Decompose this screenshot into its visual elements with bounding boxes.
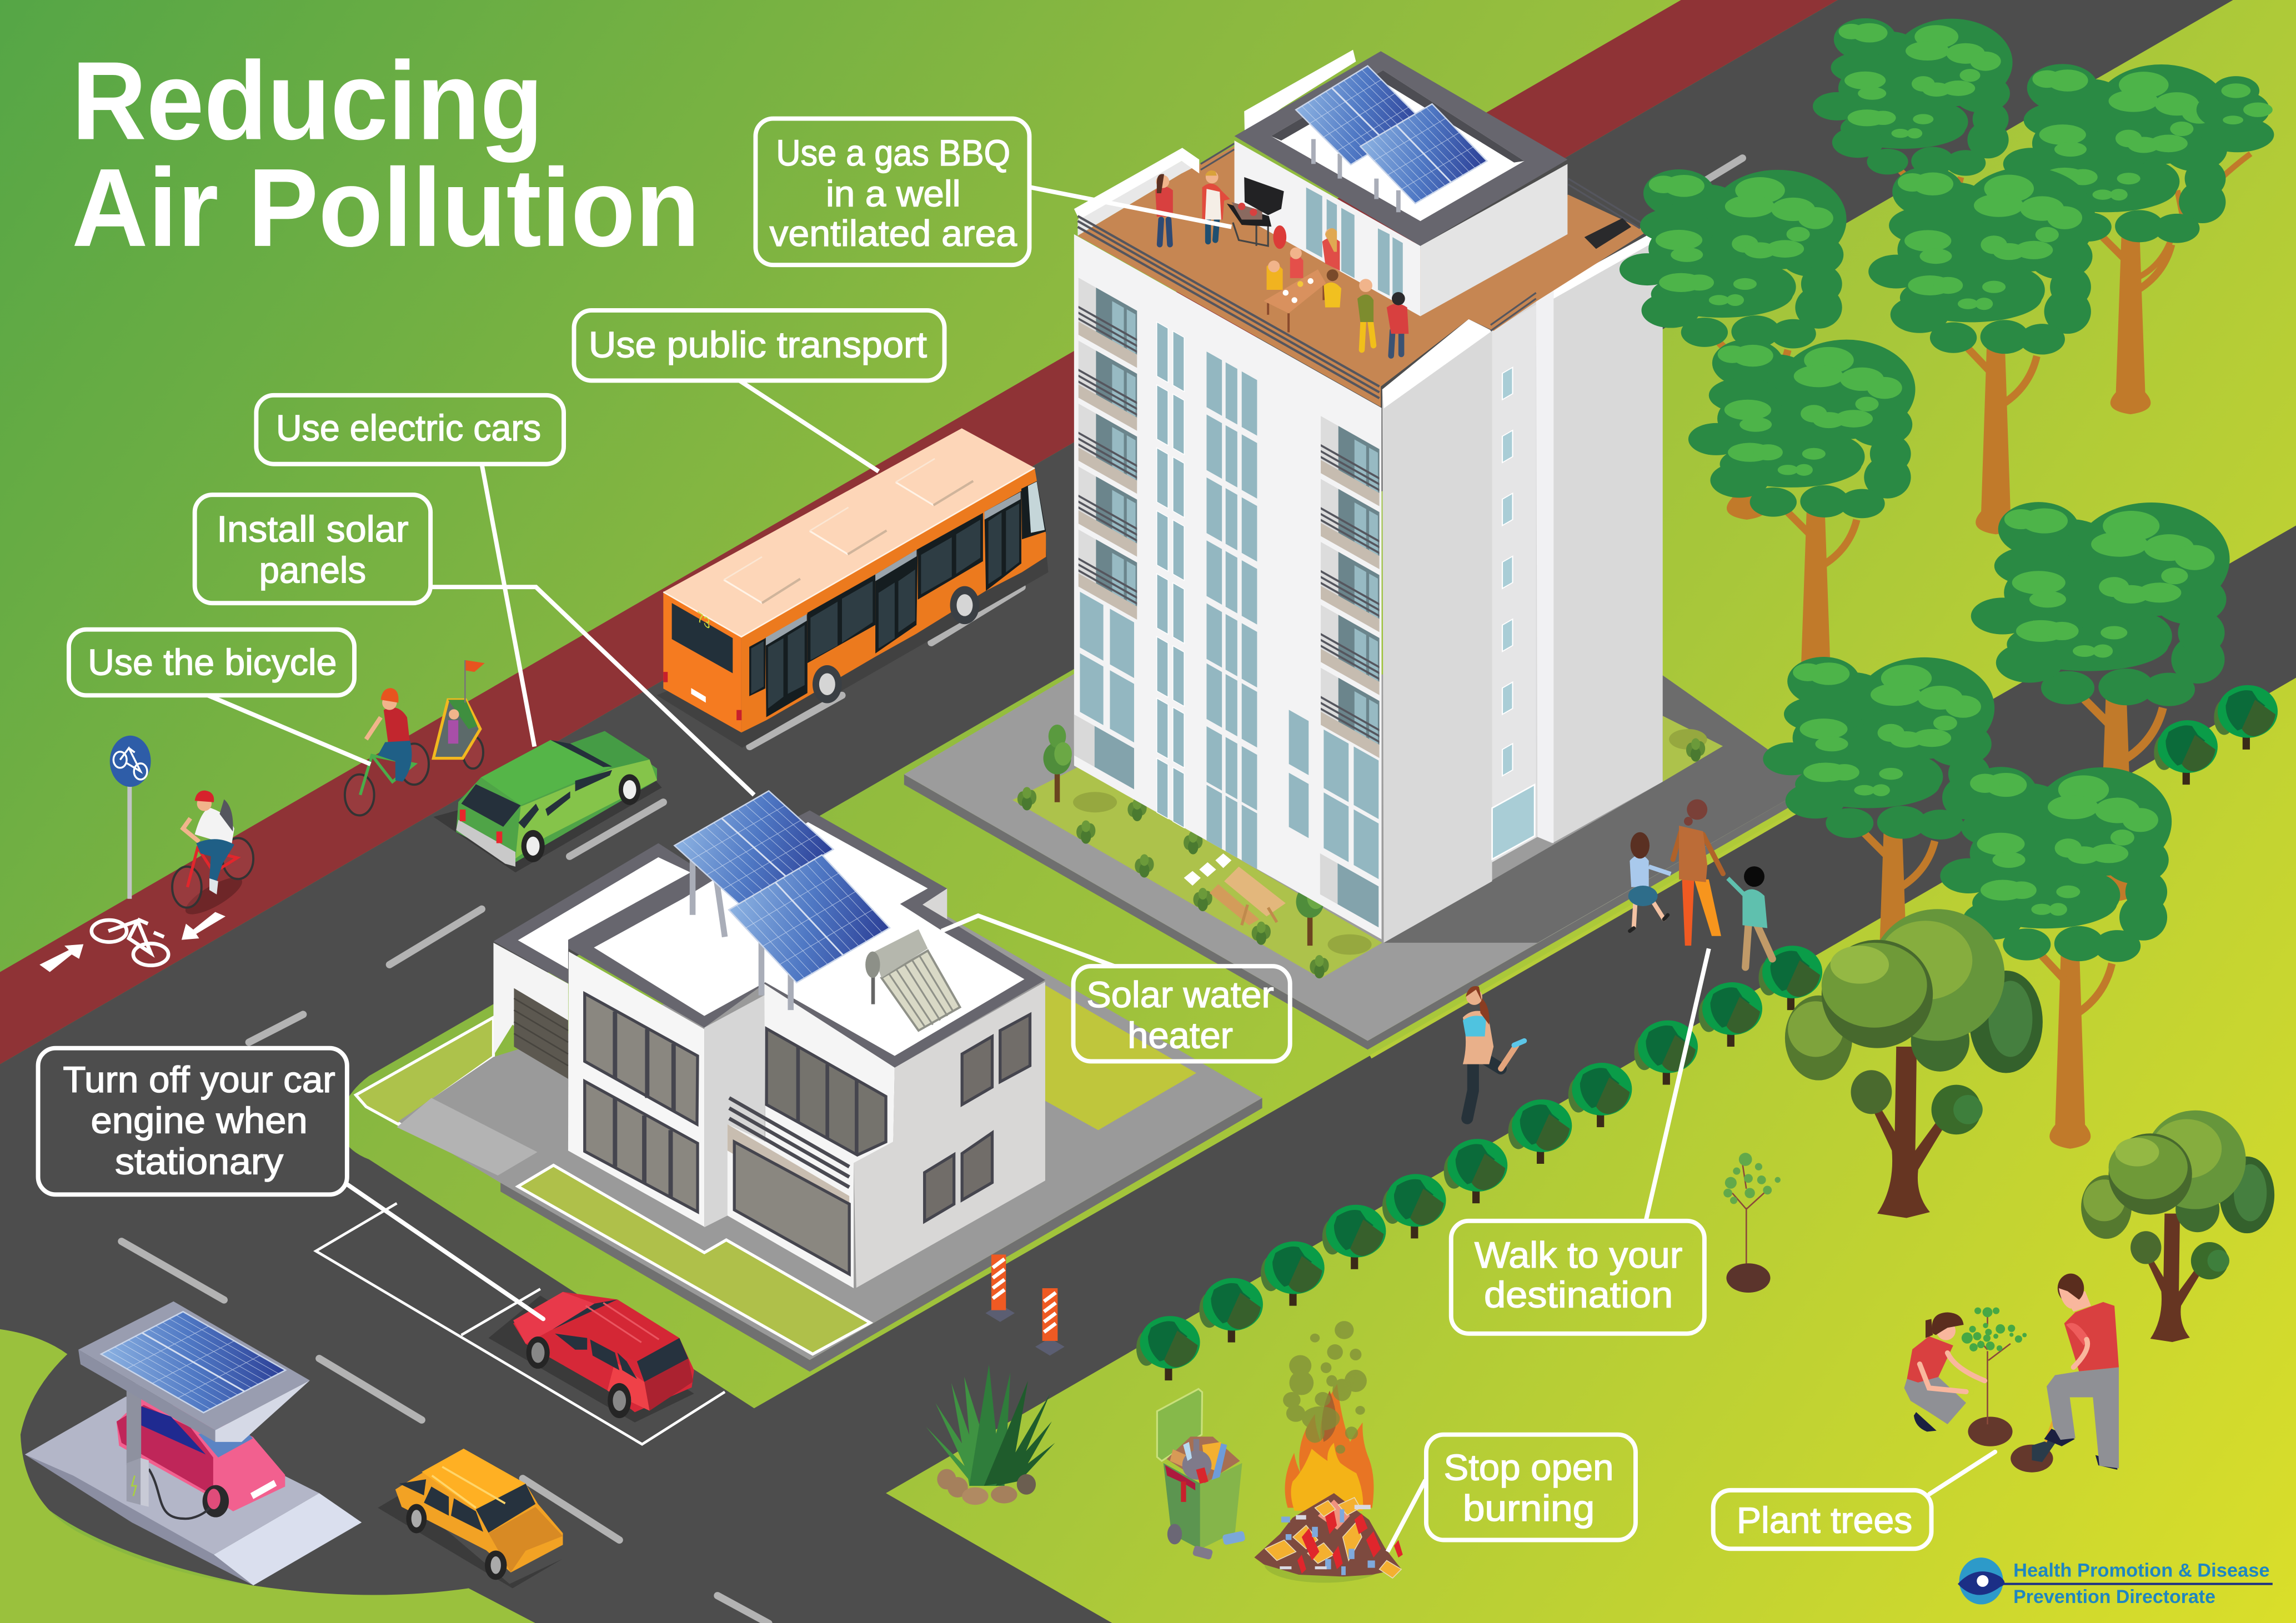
road barrier cones — [985, 1254, 1065, 1355]
callout: plant trees — [1713, 1452, 1995, 1549]
cyclist 1 — [172, 791, 253, 921]
cyclist 2 with child trailer — [345, 660, 485, 815]
title — [72, 39, 700, 270]
cycle lane road marking: bicycle and arrows — [39, 912, 225, 972]
callout: public transport: Use public transport — [589, 324, 927, 365]
people planting a tree — [1904, 1274, 2119, 1473]
house solar panels — [674, 791, 890, 1010]
red car — [489, 1292, 694, 1423]
tree — [1940, 767, 2172, 1149]
callout: gas BBQ: Use a gas BBQ — [776, 132, 1010, 173]
bus — [656, 428, 1048, 748]
callout: open burning: burning — [1463, 1488, 1595, 1529]
callout: solar panels — [195, 495, 754, 795]
bus: 73 — [697, 607, 710, 633]
roadside shrubs — [1136, 685, 2278, 1380]
callout: open burning — [1387, 1435, 1636, 1552]
bicycle sign — [110, 736, 151, 899]
pad — [25, 1396, 362, 1585]
house roof — [493, 811, 1045, 1068]
open burning: smoke, fire and waste pile — [1254, 1321, 1403, 1582]
main front wall — [568, 952, 895, 1288]
right side wall — [1382, 227, 1663, 943]
bicycle lane — [0, 0, 1838, 1064]
charger pole — [127, 1383, 149, 1507]
front wall with windows and balconies — [1074, 234, 1382, 939]
EV charging station — [25, 1302, 362, 1585]
yellow car — [378, 1449, 563, 1589]
callout: solar water heater: heater — [1127, 1015, 1233, 1056]
forecourt garden: shrubs, picnic table, small trees — [1017, 725, 1707, 978]
title: Reducing — [72, 39, 543, 163]
callout: bicycle: Use the bicycle — [88, 641, 337, 682]
tree sapling with soil mounds — [1962, 1307, 2053, 1473]
callout: plant trees: Plant trees — [1737, 1499, 1912, 1540]
tree with side branch — [2003, 64, 2274, 414]
callout: solar water heater: Solar water — [1086, 974, 1274, 1015]
girl — [1628, 832, 1671, 931]
large low-poly tree — [1785, 909, 2043, 1218]
callout: turn off engine — [38, 1048, 543, 1319]
solar water heater — [865, 929, 960, 1031]
callout: bicycle — [69, 630, 370, 764]
penthouse — [1235, 50, 1567, 316]
tree — [1813, 18, 2013, 326]
cook with apron — [1202, 170, 1230, 242]
callout: electric cars — [256, 395, 564, 747]
tree — [1868, 167, 2096, 534]
grass corner with EV bay — [0, 1329, 536, 1623]
grass plant with stones — [926, 1365, 1055, 1505]
logo: Health Promotion and Disease Prevention Directorate: Prevention Directorate — [2013, 1586, 2215, 1607]
standing woman — [1322, 228, 1340, 271]
side wall and windows — [854, 982, 1045, 1288]
boy — [1728, 866, 1772, 967]
road markings — [122, 158, 1742, 1623]
tree — [1620, 169, 1847, 520]
annex wall with garage door — [493, 943, 568, 1079]
logo: Health Promotion and Disease Prevention Directorate: Health Promotion & Disease — [2013, 1560, 2270, 1581]
small low-poly tree — [2081, 1111, 2274, 1342]
apartment building — [1074, 50, 1663, 943]
tree — [1971, 502, 2230, 901]
trees behind — [1620, 18, 2274, 1149]
apartment forecourt paving — [904, 674, 1816, 1057]
outdoor bench — [1585, 218, 1631, 249]
gas barbecue grill — [1227, 177, 1286, 249]
dining table — [1264, 269, 1326, 332]
solar canopy — [78, 1302, 310, 1442]
family walking — [1628, 799, 1772, 967]
callout: gas BBQ — [755, 119, 1231, 265]
green car — [433, 731, 662, 872]
person holding skewers — [1155, 174, 1173, 244]
mother — [1673, 799, 1723, 946]
callout: solar panels: panels — [259, 549, 366, 590]
smoke — [1283, 1321, 1367, 1454]
runner — [1463, 986, 1525, 1118]
overflowing green waste bin — [1157, 1389, 1246, 1560]
callout: walk — [1451, 948, 1709, 1334]
logo: Health Promotion and Disease Prevention Directorate — [1958, 1557, 2273, 1607]
woman kneeling — [1904, 1313, 1984, 1431]
callout: solar water heater — [941, 916, 1290, 1061]
tree — [1763, 657, 1994, 1014]
callout: walk: destination — [1484, 1274, 1673, 1315]
waste pile — [1254, 1493, 1403, 1582]
callout: turn off engine: engine when — [91, 1100, 308, 1141]
callout: electric cars: Use electric cars — [276, 408, 541, 449]
rooftop barbecue scene — [1155, 170, 1408, 356]
callout: open burning: Stop open — [1444, 1446, 1613, 1488]
callout: public transport — [574, 310, 945, 471]
house — [493, 791, 1045, 1288]
callout: solar panels: Install solar — [217, 508, 409, 549]
callout: turn off engine: stationary — [115, 1140, 283, 1182]
pink electric car — [117, 1398, 285, 1519]
callout: walk: Walk to your — [1475, 1234, 1682, 1275]
sapling — [1723, 1153, 1781, 1293]
roof terrace deck — [1074, 143, 1647, 407]
seated diners — [1267, 248, 1341, 308]
callout: gas BBQ: ventilated area — [769, 213, 1017, 254]
house paving and front lawn — [356, 916, 1262, 1371]
two men with drinks — [1357, 279, 1408, 356]
callout: turn off engine: Turn off your car — [63, 1059, 335, 1100]
man with spade — [2032, 1274, 2119, 1470]
callout: gas BBQ: in a well — [826, 173, 961, 214]
tree — [1688, 339, 1916, 690]
flames — [1285, 1384, 1373, 1511]
title: Air Pollution — [72, 146, 700, 270]
